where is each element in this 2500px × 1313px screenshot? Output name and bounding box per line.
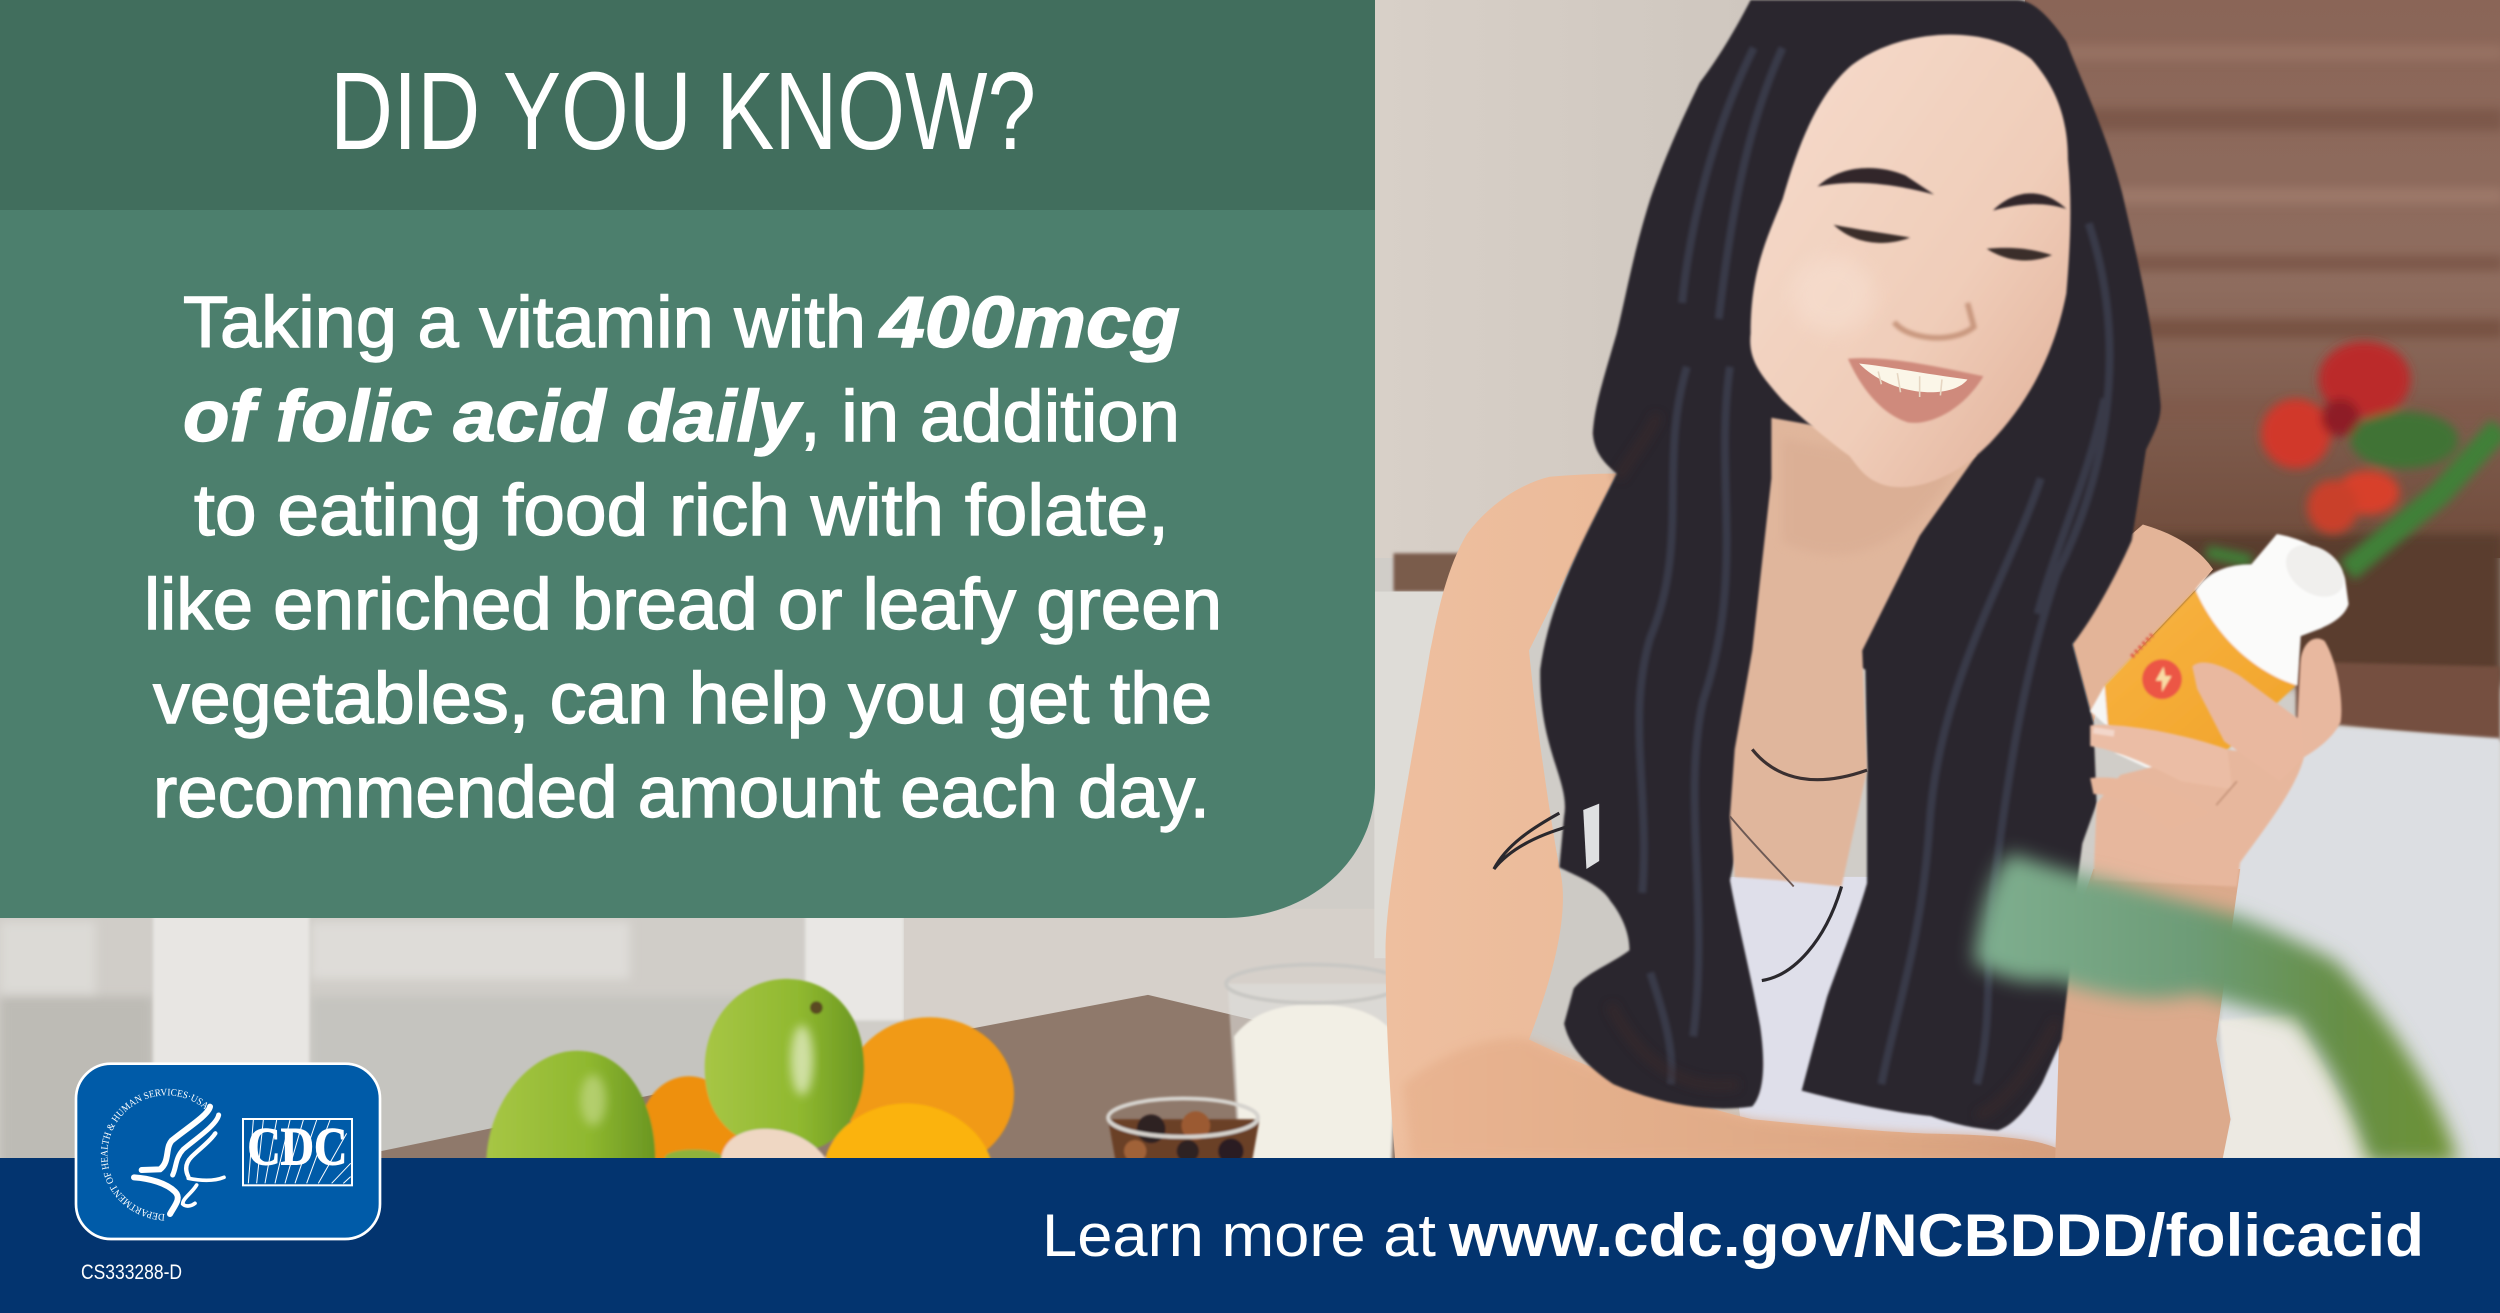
hair highlights bbox=[1639, 48, 2110, 1084]
fact text: recommended amount each day. bbox=[153, 753, 1210, 833]
blurred foreground leaf bbox=[1974, 853, 2459, 1164]
heading: DID YOU KNOW? bbox=[330, 50, 1036, 173]
left arm bbox=[1386, 474, 2073, 1159]
eyes bbox=[1834, 225, 1910, 243]
jar of nuts and raisins bbox=[1108, 1099, 1260, 1164]
table bbox=[381, 995, 1403, 1164]
hair wisp bbox=[1494, 813, 1570, 869]
tank top bbox=[1730, 876, 2059, 1148]
footer banner bbox=[0, 1158, 2500, 1313]
fact text: of folic acid daily bbox=[183, 377, 804, 457]
learn more link text bbox=[1042, 1202, 2424, 1269]
woman: neck and chest bbox=[1730, 418, 1977, 886]
woman: body bbox=[1386, 474, 2240, 1159]
bottle label bbox=[2142, 659, 2182, 699]
glass of milk bbox=[1226, 965, 1401, 1164]
fact text bbox=[144, 283, 1222, 833]
panel header band bbox=[0, 0, 1375, 210]
wood cabinet and counter bbox=[1374, 0, 2500, 1159]
fact text: vegetables, can help you get the bbox=[153, 659, 1212, 739]
learn more link text: www.cdc.gov/NCBDDD/folicacid bbox=[1448, 1202, 2424, 1269]
right upper arm bbox=[2073, 525, 2213, 722]
vitamin bottle bbox=[2090, 534, 2354, 788]
document code: CS333288-D bbox=[81, 1261, 182, 1284]
woman: tank top wisp bbox=[1762, 886, 1842, 981]
woman: face bbox=[1750, 35, 2070, 487]
fact text: 400mcg bbox=[878, 283, 1180, 363]
left forearm bbox=[1403, 1038, 2073, 1159]
logo: HHS and CDC badge bbox=[74, 1062, 382, 1240]
panel: did you know header and fact bbox=[0, 0, 1375, 918]
icon: HHS eagle with circular text: DEPARTMENT OF HEALTH & HUMAN SERVICES·USA bbox=[100, 1088, 208, 1221]
white strap glimpses bbox=[1583, 804, 1599, 869]
woman: hair bbox=[1494, 0, 2161, 1130]
tomatoes and greens bbox=[2207, 341, 2500, 571]
palm bbox=[2093, 749, 2304, 886]
right forearm bbox=[2055, 869, 2240, 1159]
fact text: , in addition bbox=[800, 377, 1180, 457]
learn more link text: Learn more at bbox=[1042, 1202, 1436, 1269]
fact text: Taking a vitamin with bbox=[183, 283, 866, 363]
fruit bowl bbox=[485, 977, 1016, 1158]
fact text: like enriched bread or leafy green bbox=[144, 565, 1222, 645]
mouth bbox=[1848, 358, 1983, 423]
eyebrows bbox=[1818, 168, 1934, 195]
fingers bbox=[2088, 724, 2228, 768]
index finger bbox=[2296, 637, 2343, 758]
hand holding bottle bbox=[2090, 639, 2341, 886]
fact text: to eating food rich with folate, bbox=[194, 471, 1169, 551]
panel body bbox=[0, 205, 1375, 918]
nose bbox=[1894, 303, 1974, 338]
thumb bbox=[2191, 661, 2298, 757]
icon: CDC box: CDC bbox=[247, 1117, 347, 1177]
